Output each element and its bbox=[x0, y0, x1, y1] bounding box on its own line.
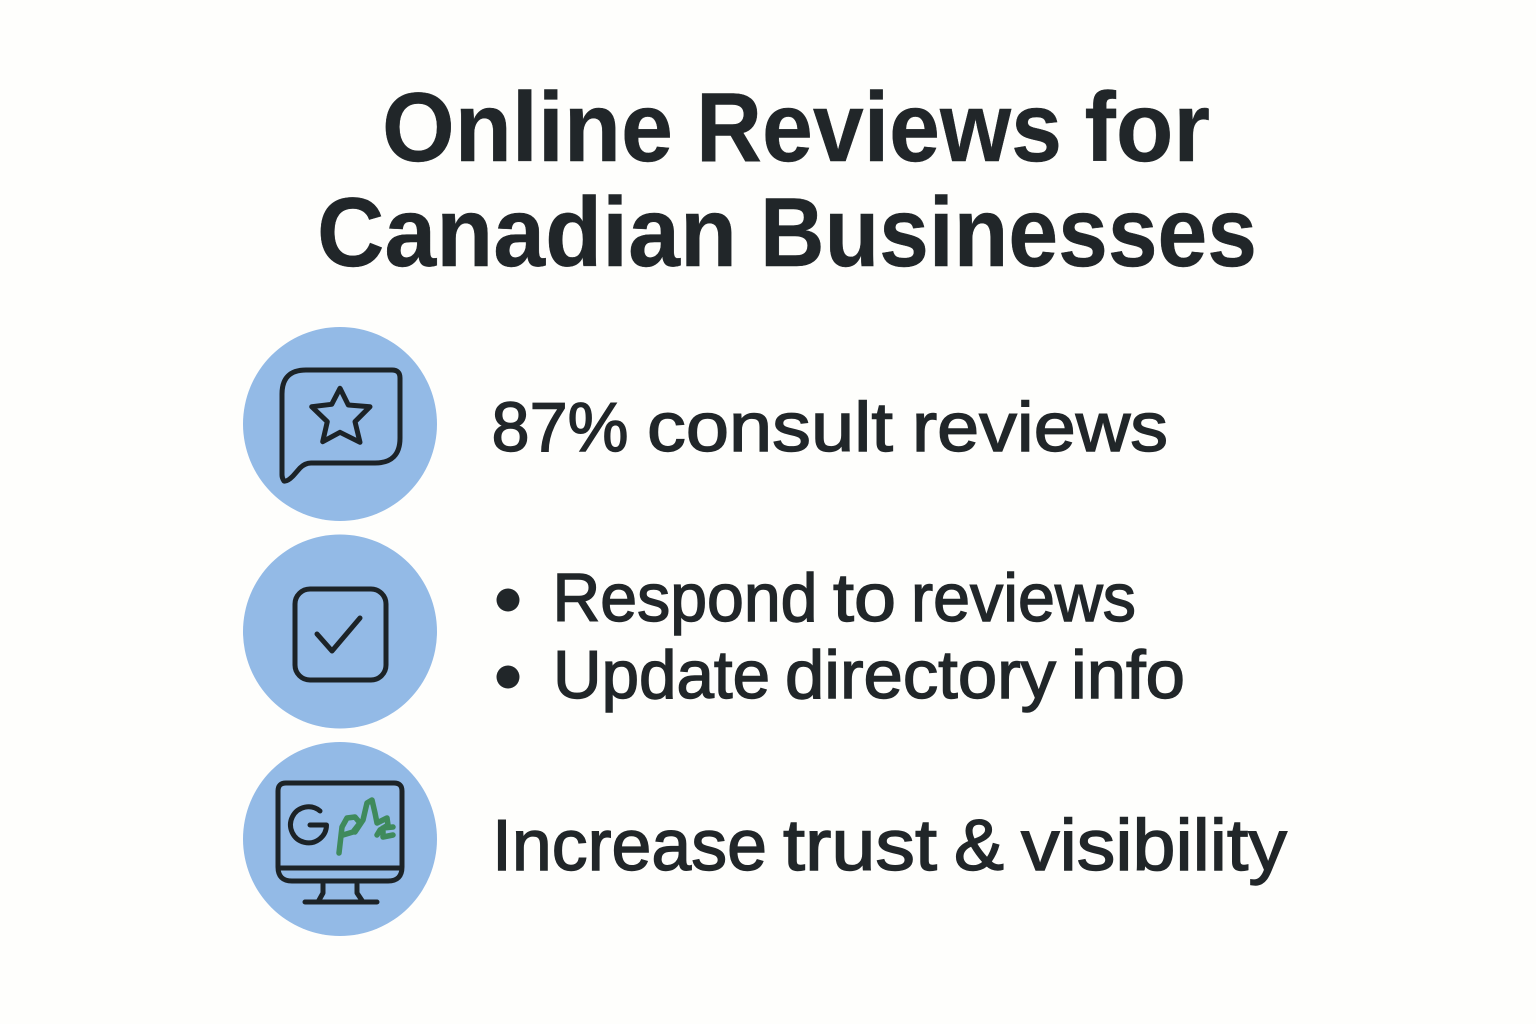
bullet list: to bbox=[833, 560, 896, 636]
text: Increase trust & visibility: trust bbox=[783, 806, 937, 886]
text: Increase trust & visibility: & bbox=[954, 806, 1004, 886]
bullet list bbox=[496, 560, 1185, 713]
bullet list: reviews bbox=[911, 560, 1136, 636]
row 2: actions bbox=[243, 534, 1185, 728]
text: Increase trust & visibility bbox=[492, 806, 1287, 886]
row 3: trust and visibility bbox=[243, 742, 1287, 936]
title: Reviews bbox=[696, 72, 1062, 182]
bullet list: Respond bbox=[552, 560, 818, 636]
text: 87% consult reviews: consult bbox=[647, 388, 893, 466]
row 1: consult reviews bbox=[243, 327, 1168, 521]
title: Canadian bbox=[317, 177, 737, 287]
title bbox=[317, 72, 1257, 287]
icon: monitor with search logo bbox=[243, 742, 437, 936]
text: Increase trust & visibility: visibility bbox=[1021, 806, 1287, 886]
title: Online bbox=[382, 72, 673, 182]
bullet list: info bbox=[1071, 637, 1185, 713]
title: Businesses bbox=[760, 177, 1257, 287]
bullet list: directory bbox=[785, 637, 1056, 713]
text: 87% consult reviews bbox=[492, 388, 1168, 466]
title: for bbox=[1084, 72, 1210, 182]
icon: speech bubble with star bbox=[243, 327, 437, 521]
text: 87% consult reviews: reviews bbox=[912, 388, 1168, 466]
bullet list: Update bbox=[553, 637, 770, 713]
text: Increase trust & visibility: Increase bbox=[492, 806, 767, 886]
icon: checkbox bbox=[243, 534, 437, 728]
text: 87% consult reviews: 87% bbox=[492, 388, 628, 466]
